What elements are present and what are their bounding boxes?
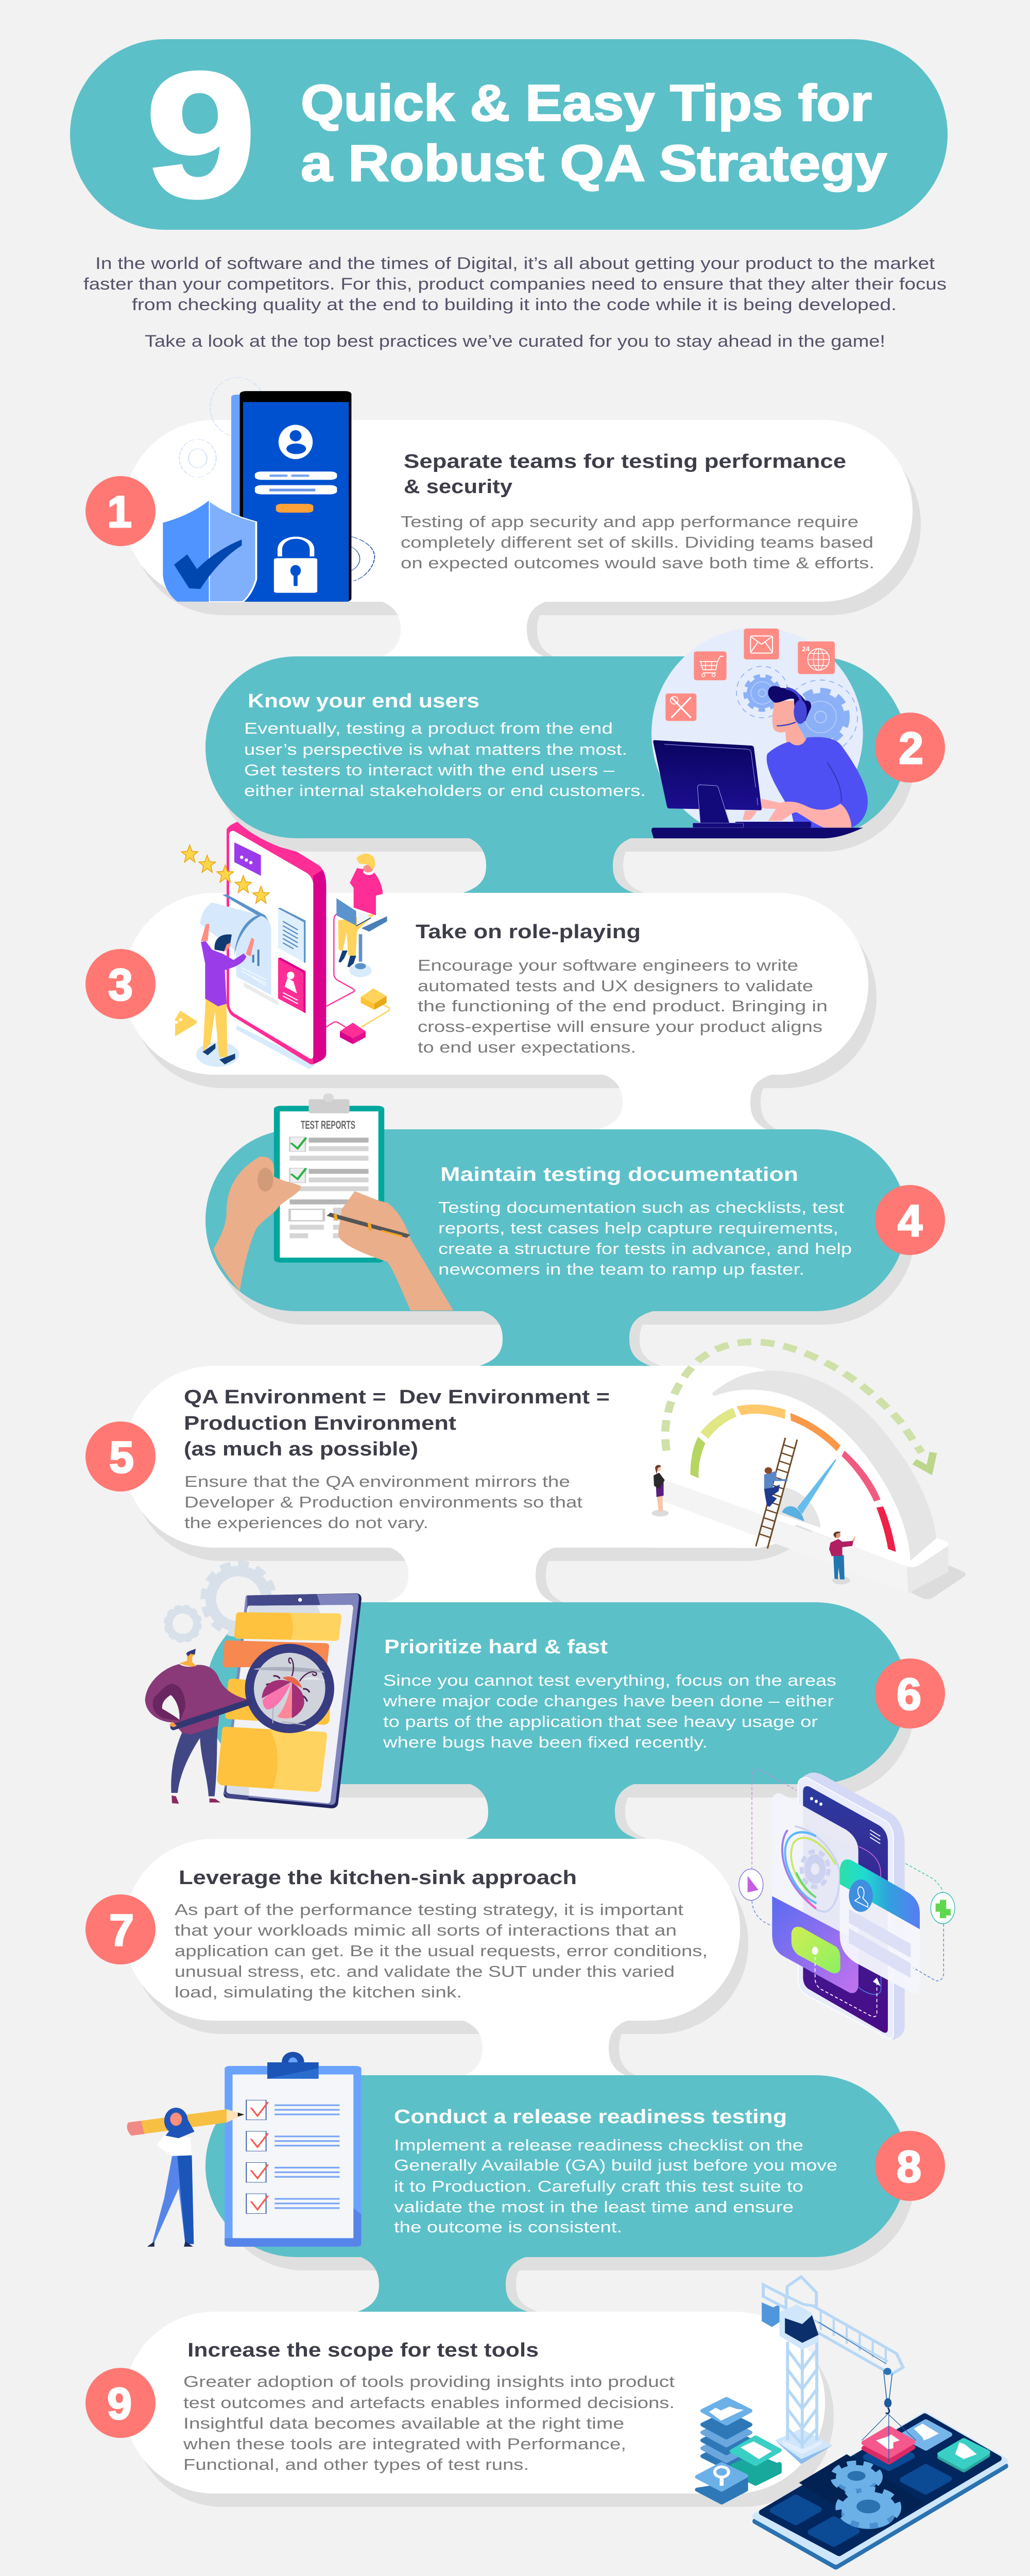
badge 1 xyxy=(85,476,156,546)
heading 1: Separate teams for testing performance xyxy=(404,451,846,472)
body text 6: to parts of the application that see heavy usage or xyxy=(383,1713,818,1731)
badge 4: 4 xyxy=(898,1196,922,1246)
badge 8 xyxy=(875,2131,945,2201)
heading 1 xyxy=(404,451,846,498)
body text 4 xyxy=(438,1198,852,1278)
body text 6: where major code changes have been done – either xyxy=(383,1692,834,1710)
body text 2: user’s perspective is what matters the most. xyxy=(244,740,627,758)
heading 9: Increase the scope for test tools xyxy=(187,2340,539,2361)
heading 6: Prioritize hard & fast xyxy=(384,1636,608,1658)
intro text: In the world of software and the times of Digital, it’s all about getting your product to the market xyxy=(95,254,935,273)
heading 2: Know your end users xyxy=(248,690,479,712)
title text: a Robust QA Strategy xyxy=(301,134,887,192)
body text 8: Implement a release readiness checklist on the xyxy=(394,2136,803,2154)
body text 4: create a structure for tests in advance, and help xyxy=(438,1240,852,1258)
body text 6: where bugs have been fixed recently. xyxy=(383,1733,708,1751)
body text 7: that your workloads mimic all sorts of interactions that an xyxy=(175,1921,677,1939)
panel: tip 6 xyxy=(145,1564,945,1840)
heading 7: Leverage the kitchen-sink approach xyxy=(179,1867,577,1889)
heading 8: Conduct a release readiness testing xyxy=(394,2106,787,2128)
body text 2: Get testers to interact with the end users – xyxy=(244,761,615,779)
badge 3 xyxy=(85,949,156,1019)
badge 9: 9 xyxy=(107,2379,132,2429)
panel: tip 2 xyxy=(205,628,945,894)
big number 9: 9 xyxy=(146,36,256,234)
body text 7: unusual stress, etc. and validate the SUT under this varied xyxy=(175,1962,675,1980)
badge 2 xyxy=(875,713,945,783)
body text 8: it to Production. Carefully craft this test suite to xyxy=(394,2177,803,2195)
heading 3: Take on role-playing xyxy=(416,921,641,943)
body text 6 xyxy=(383,1671,836,1751)
body text 7 xyxy=(175,1901,708,2001)
illustration: app screen with people and stars xyxy=(175,822,389,1069)
badge 5: 5 xyxy=(109,1433,134,1482)
body text 3: automated tests and UX designers to validate xyxy=(418,977,813,995)
illustration: clipboard test report with hands: TEST REPORTS xyxy=(301,1118,355,1131)
body text 3: the functioning of the end product. Bringing in xyxy=(418,997,828,1015)
body text 5: Developer & Production environments so that xyxy=(184,1493,582,1511)
body text 7: load, simulating the kitchen sink. xyxy=(175,1983,462,2001)
illustration: support agent at monitor: 24 xyxy=(802,645,810,653)
body text 1 xyxy=(401,513,874,572)
heading 5: QA Environment = Dev Environment = xyxy=(184,1386,610,1408)
panel: tip 7 xyxy=(85,1770,955,2076)
badge 8: 8 xyxy=(897,2142,921,2192)
badge 2: 2 xyxy=(899,724,923,773)
body text 9: Greater adoption of tools providing insights into product xyxy=(183,2372,675,2391)
body text 4: Testing documentation such as checklists, test xyxy=(438,1198,844,1216)
title banner xyxy=(70,36,948,234)
heading 5: Production Environment xyxy=(184,1413,456,1434)
panel: tip 9 xyxy=(85,2277,1005,2567)
illustration: support agent at monitor xyxy=(651,628,868,838)
intro text: from checking quality at the end to building it into the code while it is being developed. xyxy=(132,295,897,314)
illustration: man inspecting bug with magnifier xyxy=(145,1564,362,1808)
panel: tip 3 xyxy=(85,822,877,1130)
illustration: speedometer gauge with people xyxy=(652,1342,966,1599)
panel: tip 5 xyxy=(85,1342,966,1603)
badge 6 xyxy=(875,1658,945,1728)
badge 4 xyxy=(875,1185,945,1255)
badge 1: 1 xyxy=(107,487,132,537)
body text 8: validate the most in the least time and ensure xyxy=(394,2198,794,2216)
body text 9 xyxy=(183,2372,675,2473)
body text 9: when these tools are integrated with Performance, xyxy=(183,2435,626,2453)
body text 2: Eventually, testing a product from the end xyxy=(244,719,613,737)
body text 2: either internal stakeholders or end customers. xyxy=(244,782,646,800)
body text 7: As part of the performance testing strategy, it is important xyxy=(175,1901,683,1919)
illustration: phone login and shield xyxy=(163,378,374,602)
badge 6: 6 xyxy=(897,1670,921,1719)
body text 2 xyxy=(244,719,646,800)
body text 8: Generally Available (GA) build just before you move xyxy=(394,2156,837,2174)
body text 3: to end user expectations. xyxy=(418,1038,636,1056)
body text 1: Testing of app security and app performance require xyxy=(401,513,859,531)
illustration: checklist clipboard and woman with pencil xyxy=(127,2052,362,2247)
body text 5: the experiences do not vary. xyxy=(184,1514,428,1532)
body text 9: Insightful data becomes available at the right time xyxy=(183,2414,624,2432)
panel: tip 4 xyxy=(205,1093,945,1367)
badge 9 xyxy=(85,2368,156,2438)
heading 5: (as much as possible) xyxy=(184,1438,418,1460)
illustration: isometric phone with app cards xyxy=(739,1770,955,2040)
intro text xyxy=(83,254,947,350)
illustration: clipboard test report with hands xyxy=(214,1093,453,1311)
panel: tip 1 xyxy=(85,378,921,657)
body text 4: reports, test cases help capture requirements, xyxy=(438,1219,838,1237)
body text 9: test outcomes and artefacts enables informed decisions. xyxy=(183,2394,675,2412)
intro text: faster than your competitors. For this, product companies need to ensure that they alter their focus xyxy=(83,275,947,293)
body text 6: Since you cannot test everything, focus on the areas xyxy=(383,1671,836,1689)
heading 5 xyxy=(184,1386,610,1460)
title text xyxy=(301,74,887,192)
body text 1: on expected outcomes would save both time & efforts. xyxy=(401,554,874,572)
badge 5 xyxy=(85,1421,156,1492)
body text 3 xyxy=(418,956,828,1056)
body text 8: the outcome is consistent. xyxy=(394,2218,622,2236)
badge 3: 3 xyxy=(108,960,133,1010)
heading 1: & security xyxy=(404,476,512,498)
body text 3: Encourage your software engineers to write xyxy=(418,956,798,974)
body text 5 xyxy=(184,1472,582,1532)
body text 7: application can get. Be it the usual requests, error conditions, xyxy=(175,1942,708,1960)
intro text: Take a look at the top best practices we’ve curated for you to stay ahead in the game! xyxy=(145,332,885,350)
body text 9: Functional, and other types of test runs. xyxy=(183,2455,529,2473)
title text: Quick & Easy Tips for xyxy=(301,74,872,131)
panel: tip 8 xyxy=(127,2052,945,2313)
badge 7 xyxy=(85,1894,156,1964)
badge 7: 7 xyxy=(109,1906,134,1955)
body text 5: Ensure that the QA environment mirrors the xyxy=(184,1472,570,1490)
body text 8 xyxy=(394,2136,837,2236)
heading 4: Maintain testing documentation xyxy=(440,1164,798,1185)
illustration: crane placing apps on phone xyxy=(697,2277,1005,2567)
body text 1: completely different set of skills. Dividing teams based xyxy=(401,533,873,551)
body text 4: newcomers in the team to ramp up faster. xyxy=(438,1260,804,1278)
body text 3: cross-expertise will ensure your product aligns xyxy=(418,1018,822,1036)
